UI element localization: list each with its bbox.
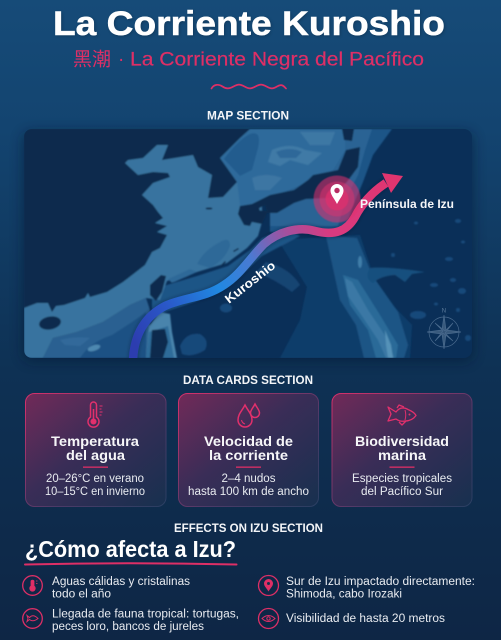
effect: visibilidad: [258, 608, 445, 628]
card heading: [51, 433, 139, 463]
icon: eye badge: [258, 608, 278, 628]
luzon rim: [146, 312, 177, 358]
bathymetry and land: [24, 129, 471, 358]
card text: [45, 473, 145, 498]
sea of japan: [220, 129, 345, 206]
effect: fauna tropical: peces loro, bancos de jureles: [52, 621, 204, 633]
seamounts: [180, 219, 471, 355]
heading: effects section: EFFECTS ON IZU SECTION: [174, 523, 323, 535]
map panel: [24, 129, 472, 360]
card text: Especies tropicales: [352, 473, 452, 485]
effect: sur de Izu: Sur de Izu impactado directamente:: [286, 576, 475, 588]
wave divider: [212, 85, 286, 88]
location marker: [314, 176, 360, 222]
icon: thermometer: [88, 402, 102, 427]
icon: fish: [388, 405, 416, 425]
current arrow: [133, 173, 403, 360]
card text: del Pacífico Sur: [361, 486, 443, 498]
china shelf: [24, 129, 262, 358]
title: La Corriente Kuroshio: [54, 6, 446, 44]
card heading: Biodiversidad: [355, 433, 449, 449]
location label: Península de Izu: [360, 199, 454, 211]
card: biodiversidad: [332, 394, 472, 506]
icon: thermometer badge: [23, 576, 42, 595]
effect: fauna tropical: [23, 608, 239, 633]
compass rose: N: [442, 308, 446, 314]
heading: data cards section: DATA CARDS SECTION: [183, 375, 313, 387]
card text: [188, 473, 309, 498]
card heading: del agua: [66, 447, 125, 463]
card text: [352, 473, 452, 498]
current label: Kuroshio: [222, 258, 278, 306]
effect: visibilidad: Visibilidad de hasta 20 metros: [286, 613, 445, 625]
effect: aguas calidas: [23, 576, 190, 600]
land masses: [24, 129, 360, 358]
effect: fauna tropical: Llegada de fauna tropical: tortugas,: [52, 608, 239, 620]
east china sea contour: [198, 240, 230, 268]
card text: 20–26°C en verano: [46, 473, 144, 485]
icon: fish badge: [23, 609, 42, 628]
effect: sur de Izu: [258, 576, 475, 600]
card: velocidad: [178, 394, 318, 506]
card heading: Velocidad de: [204, 433, 293, 449]
title: La Corriente Kuroshio: [53, 5, 445, 43]
card heading: [355, 433, 449, 463]
card text: 10–15°C en invierno: [45, 486, 145, 498]
philippine sea plateau: [278, 235, 412, 358]
card heading: marina: [378, 447, 426, 463]
panel shadow: [22, 131, 474, 362]
icon: water drops: [238, 404, 260, 427]
subtitle: ·: [118, 50, 124, 70]
subtitle: La Corriente Negra del Pacífico: [130, 48, 424, 70]
compass rose: [427, 308, 461, 349]
heading: map section: MAP SECTION: [207, 110, 289, 122]
effect: aguas calidas: todo el año: [52, 588, 111, 600]
effect: sur de Izu: Shimoda, cabo Irozaki: [286, 588, 402, 600]
band below the shelf: [152, 233, 300, 313]
icon: pin badge: [258, 576, 278, 596]
card: temperatura: [26, 394, 166, 506]
card text: hasta 100 km de ancho: [188, 486, 309, 498]
effect: aguas calidas: Aguas cálidas y cristalinas: [52, 576, 190, 588]
card heading: Temperatura: [51, 433, 139, 449]
card heading: la corriente: [209, 447, 288, 463]
card heading: [204, 433, 293, 463]
heading: como afecta a Izu: ¿Cómo afecta a Izu?: [25, 536, 236, 562]
south china sea contours: [43, 298, 150, 358]
trough specks: [170, 248, 239, 283]
east of Japan rim: [270, 129, 392, 232]
subtitle: 黑潮: [73, 48, 111, 70]
undersea ridge: [326, 236, 425, 358]
card text: 2–4 nudos: [222, 473, 276, 485]
